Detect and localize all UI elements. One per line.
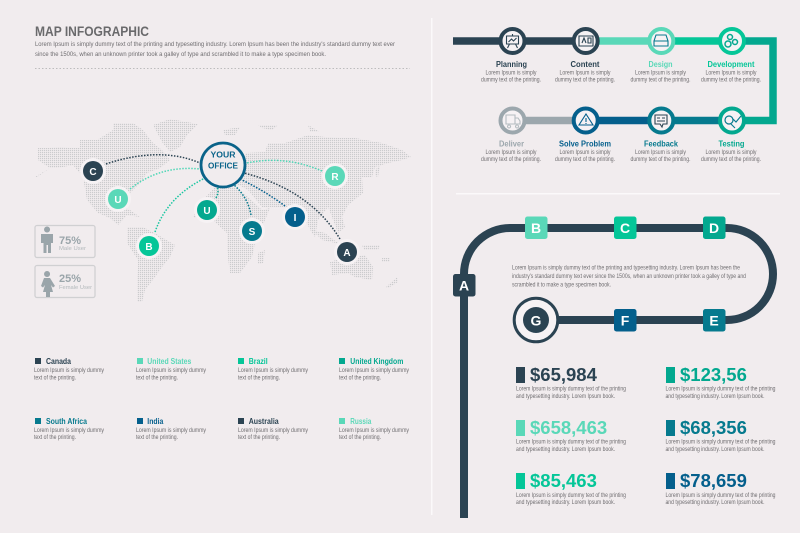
title: MAP INFOGRAPHIC (35, 24, 149, 39)
step: Design (630, 29, 691, 84)
icon: presentation board (506, 34, 518, 48)
female user stat (35, 266, 95, 298)
stat: $78,659: $78,659 (680, 470, 747, 491)
step: Planning: Planning (496, 59, 527, 69)
legend: Canada: text of the printing. (34, 376, 76, 382)
stat: $68,356: $68,356 (680, 417, 747, 438)
dotted world map (35, 119, 411, 302)
road description: industry's standard dummy text ever since the 1500s, when an unknown printer took a galley of type and (512, 274, 746, 280)
step: Content: Content (570, 59, 600, 69)
step: Planning: dummy text of the printing. (481, 78, 541, 84)
step: Development: dummy text of the printing. (701, 78, 761, 84)
legend: Australia: text of the printing. (238, 435, 280, 441)
icon: warning triangle (579, 114, 593, 125)
map pin U (105, 186, 131, 212)
stat: $65,984: and typesetting industry. Lorem Ipsum book. (516, 394, 615, 400)
stat: $123,56: $123,56 (680, 364, 747, 385)
road stop E: E (709, 312, 719, 328)
road stop F (614, 309, 636, 332)
stat: $85,463: $85,463 (530, 470, 597, 491)
step: Solve Problem: Lorem Ipsum is simply (560, 150, 610, 156)
road track (464, 228, 773, 518)
map pin U (194, 197, 220, 223)
legend: Australia (238, 416, 308, 441)
legend: Australia: Lorem Ipsum is simply dummy (238, 428, 308, 434)
step: Deliver: Deliver (499, 138, 525, 148)
legend: United States: United States (147, 356, 191, 366)
road stop B: B (531, 220, 541, 236)
stat: $78,659: Lorem Ipsum is simply dummy text of the printing (666, 493, 776, 499)
road stop B (525, 216, 548, 239)
step: Content: dummy text of the printing. (555, 78, 615, 84)
male user stat: 75% (59, 235, 81, 247)
road stop D: D (709, 220, 719, 236)
legend: United States: text of the printing. (136, 376, 178, 382)
stat: $658,463: Lorem Ipsum is simply dummy text of the printing (516, 440, 626, 446)
map pin I (282, 204, 308, 230)
legend: South Africa: text of the printing. (34, 435, 76, 441)
step: Deliver (481, 108, 541, 163)
step: Design: dummy text of the printing. (630, 78, 691, 84)
road stop A (453, 274, 476, 296)
step: Solve Problem: Solve Problem (559, 138, 611, 148)
step: Content: Lorem Ipsum is simply (560, 70, 610, 76)
step: Design: Design (648, 59, 672, 69)
legend: Russia: Lorem Ipsum is simply dummy (339, 428, 409, 434)
step: Content (555, 29, 615, 84)
legend: South Africa: Lorem Ipsum is simply dummy (34, 428, 104, 434)
icon: content card (579, 36, 593, 46)
stat: $65,984: $65,984 (530, 364, 598, 385)
map pin R: R (331, 172, 339, 183)
icon: male (41, 227, 53, 253)
map pin C (80, 158, 106, 184)
stat: $123,56: Lorem Ipsum is simply dummy text of the printing (666, 387, 776, 393)
map pin A (334, 239, 360, 265)
step: Testing (701, 108, 761, 163)
step: Deliver: dummy text of the printing. (481, 157, 541, 163)
road stop F: F (621, 312, 630, 328)
step: Solve Problem (555, 108, 615, 163)
legend: Russia: text of the printing. (339, 435, 381, 441)
office marker (201, 143, 245, 187)
legend: United Kingdom: text of the printing. (339, 376, 381, 382)
intro text: since the 1500s, when an unknown printer took a galley of type and scrambled it to make a type specimen book. (35, 52, 326, 58)
legend: Canada: Lorem Ipsum is simply dummy (34, 368, 104, 374)
office marker: YOUR (210, 150, 236, 160)
legend: Brazil: Lorem Ipsum is simply dummy (238, 368, 308, 374)
step: Design: Lorem Ipsum is simply (635, 70, 686, 76)
map pin R (322, 163, 348, 189)
icon: truck (506, 115, 520, 128)
legend: Russia (339, 416, 409, 441)
step: Feedback (630, 108, 691, 163)
female user stat: Female User (59, 285, 92, 291)
step: Deliver: Lorem Ipsum is simply (486, 150, 536, 156)
step: Planning (481, 29, 541, 84)
icon: gears (725, 34, 738, 47)
stat: $658,463: $658,463 (530, 417, 607, 438)
legend: Canada: Canada (46, 356, 71, 366)
stat: $78,659: and typesetting industry. Lorem Ipsum book. (666, 500, 765, 506)
legend: Canada (34, 356, 104, 382)
step: Development: Lorem Ipsum is simply (706, 70, 756, 76)
step: Development (701, 29, 761, 84)
road stop A: A (459, 278, 469, 294)
step: Feedback: dummy text of the printing. (630, 157, 691, 163)
step: Feedback: Lorem Ipsum is simply (635, 150, 686, 156)
legend: Brazil: Brazil (249, 356, 268, 366)
map pin I: I (294, 213, 297, 224)
map pin B: B (145, 242, 153, 253)
road description (512, 266, 746, 288)
map pin U: U (203, 206, 211, 217)
legend: India: Lorem Ipsum is simply dummy (136, 428, 206, 434)
stat: $123,56 (666, 364, 776, 400)
map pin U: U (114, 195, 122, 206)
legend: Russia: Russia (350, 416, 371, 426)
map pin S: S (249, 227, 256, 238)
icon: magnifier check (731, 116, 741, 128)
step: Planning: Lorem Ipsum is simply (486, 70, 536, 76)
step: Solve Problem: dummy text of the printing. (555, 157, 615, 163)
legend: United Kingdom: Lorem Ipsum is simply dummy (339, 368, 409, 374)
icon: female (41, 271, 55, 297)
legend: Brazil (238, 356, 308, 382)
map pin B (136, 233, 162, 259)
stat: $68,356 (666, 417, 776, 453)
legend: United Kingdom: United Kingdom (350, 356, 404, 366)
road stop E (703, 309, 726, 332)
map pin A: A (343, 248, 351, 259)
legend: United States (136, 356, 206, 382)
road description: Lorem Ipsum is simply dummy text of the printing and typesetting industry. Lorem Ipsum has been the (512, 266, 741, 272)
stat: $65,984: Lorem Ipsum is simply dummy text of the printing (516, 387, 626, 393)
legend: Brazil: text of the printing. (238, 376, 280, 382)
stat: $65,984 (516, 364, 626, 400)
stat: $123,56: and typesetting industry. Lorem Ipsum book. (666, 394, 765, 400)
stat: $85,463 (516, 470, 626, 506)
road description: scrambled it to make a type specimen book. (512, 282, 611, 288)
male user stat: Male User (59, 246, 86, 252)
road stop G (514, 298, 558, 342)
stat: $68,356: and typesetting industry. Lorem Ipsum book. (666, 447, 765, 453)
legend: South Africa: South Africa (46, 416, 87, 426)
step: Development: Development (708, 59, 755, 69)
road stop C: C (620, 220, 630, 236)
connection lines (106, 155, 340, 239)
female user stat: 25% (59, 273, 81, 285)
road stop G: G (531, 312, 542, 328)
step: Testing: Testing (718, 138, 744, 148)
map pin S (239, 218, 265, 244)
legend: India: text of the printing. (136, 435, 178, 441)
map pin C: C (89, 167, 97, 178)
road stop D (703, 216, 726, 239)
stat: $658,463 (516, 417, 626, 453)
stat: $78,659 (666, 470, 776, 506)
legend: Australia: Australia (249, 416, 279, 426)
stat: $85,463: Lorem Ipsum is simply dummy text of the printing (516, 493, 626, 499)
office marker: OFFICE (208, 160, 238, 170)
stat: $85,463: and typesetting industry. Lorem Ipsum book. (516, 500, 615, 506)
icon: tray (654, 35, 668, 46)
legend: India (136, 416, 206, 441)
road stop C (614, 216, 636, 239)
intro text (35, 42, 395, 58)
process line (453, 41, 773, 120)
icon: speech bubble (655, 115, 667, 127)
legend: South Africa (34, 416, 104, 441)
male user stat (35, 226, 95, 258)
stat: $68,356: Lorem Ipsum is simply dummy text of the printing (666, 440, 776, 446)
step: Testing: Lorem Ipsum is simply (706, 150, 756, 156)
intro text: Lorem Ipsum is simply dummy text of the printing and typesetting industry. Lorem Ipsum has been the industry's standard dummy text ever (35, 42, 395, 48)
step: Testing: dummy text of the printing. (701, 157, 761, 163)
stat: $658,463: and typesetting industry. Lorem Ipsum book. (516, 447, 615, 453)
legend: United Kingdom (339, 356, 409, 382)
legend: United States: Lorem Ipsum is simply dummy (136, 368, 206, 374)
legend: India: India (147, 416, 163, 426)
step: Feedback: Feedback (644, 138, 678, 148)
